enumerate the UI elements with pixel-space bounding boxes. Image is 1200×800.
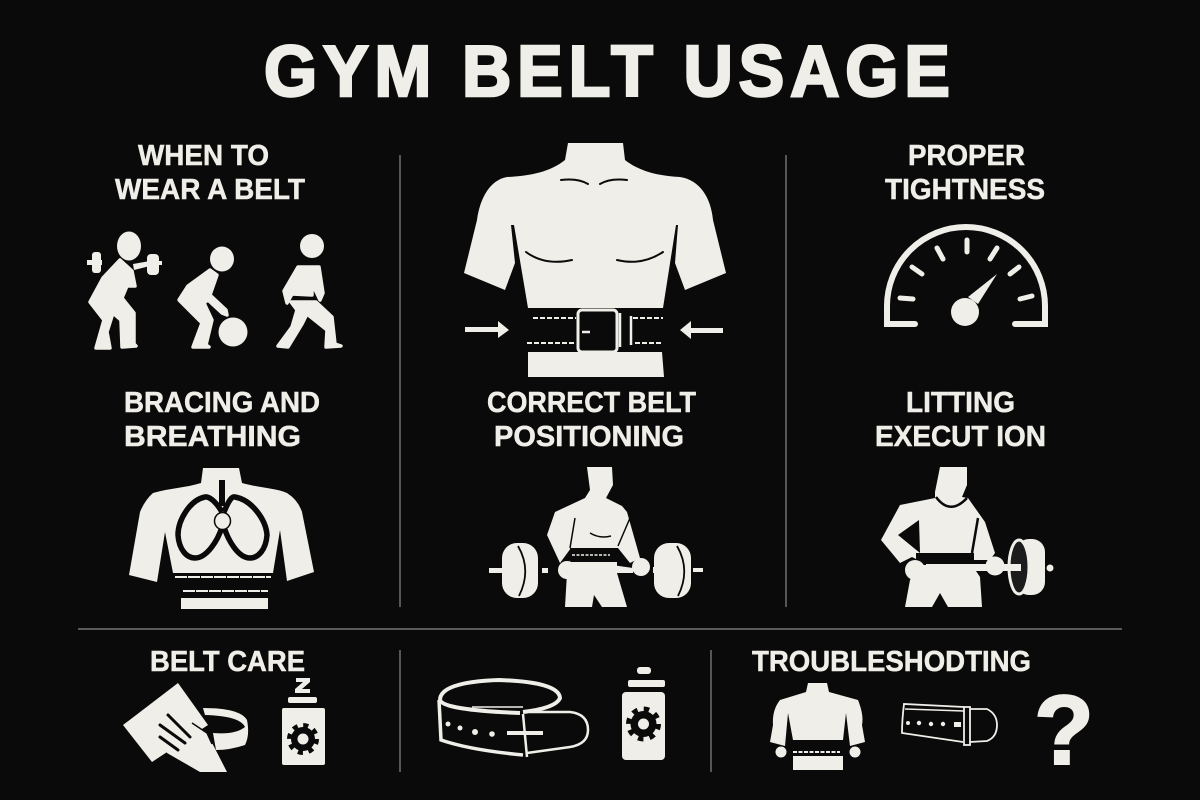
icon: torso with lungs [129, 468, 314, 609]
heading: correct belt positioning: POSITIONING [494, 421, 684, 453]
icon: question mark: ? [1034, 675, 1094, 785]
heading: belt care: BELT CARE [150, 646, 305, 678]
heading: bracing and breathing [124, 387, 320, 453]
arrow: right [680, 321, 723, 339]
icon: conditioner bottle [622, 667, 665, 760]
icon: belt outline [902, 704, 997, 745]
heading: when to wear a belt [115, 140, 305, 206]
heading: when to wear a belt: WEAR A BELT [115, 174, 305, 206]
title: GYM BELT USAGE [264, 30, 950, 111]
heading: troubleshooting: TROUBLESHODTING [752, 646, 1031, 678]
heading: proper tightness: PROPER [908, 140, 1025, 172]
heading: lifting execution: LITTING [906, 387, 1015, 419]
icon: back torso with belt [770, 683, 865, 770]
icon: leather belt [439, 680, 588, 757]
icon: three lifting figures [87, 232, 341, 348]
icon: tightness gauge [887, 227, 1045, 326]
heading: when to wear a belt: WHEN TO [138, 140, 269, 172]
arrow: left [465, 321, 509, 338]
heading: bracing and breathing: BREATHING [124, 421, 301, 453]
icon: lifting figure with barbell [881, 467, 1054, 607]
icon: spray bottle [282, 678, 325, 765]
heading: bracing and breathing: BRACING AND [124, 387, 320, 419]
heading: correct belt positioning [487, 387, 696, 453]
icon: deadlift figure [489, 467, 703, 607]
icon: torso with belt and arrows [464, 143, 726, 377]
icon: cleaning cloth and belt [123, 683, 248, 772]
heading: lifting execution [875, 387, 1046, 453]
heading: correct belt positioning: CORRECT BELT [487, 387, 696, 419]
heading: proper tightness [885, 140, 1045, 206]
heading: lifting execution: EXECUT ION [875, 421, 1046, 453]
heading: proper tightness: TIGHTNESS [885, 174, 1045, 206]
